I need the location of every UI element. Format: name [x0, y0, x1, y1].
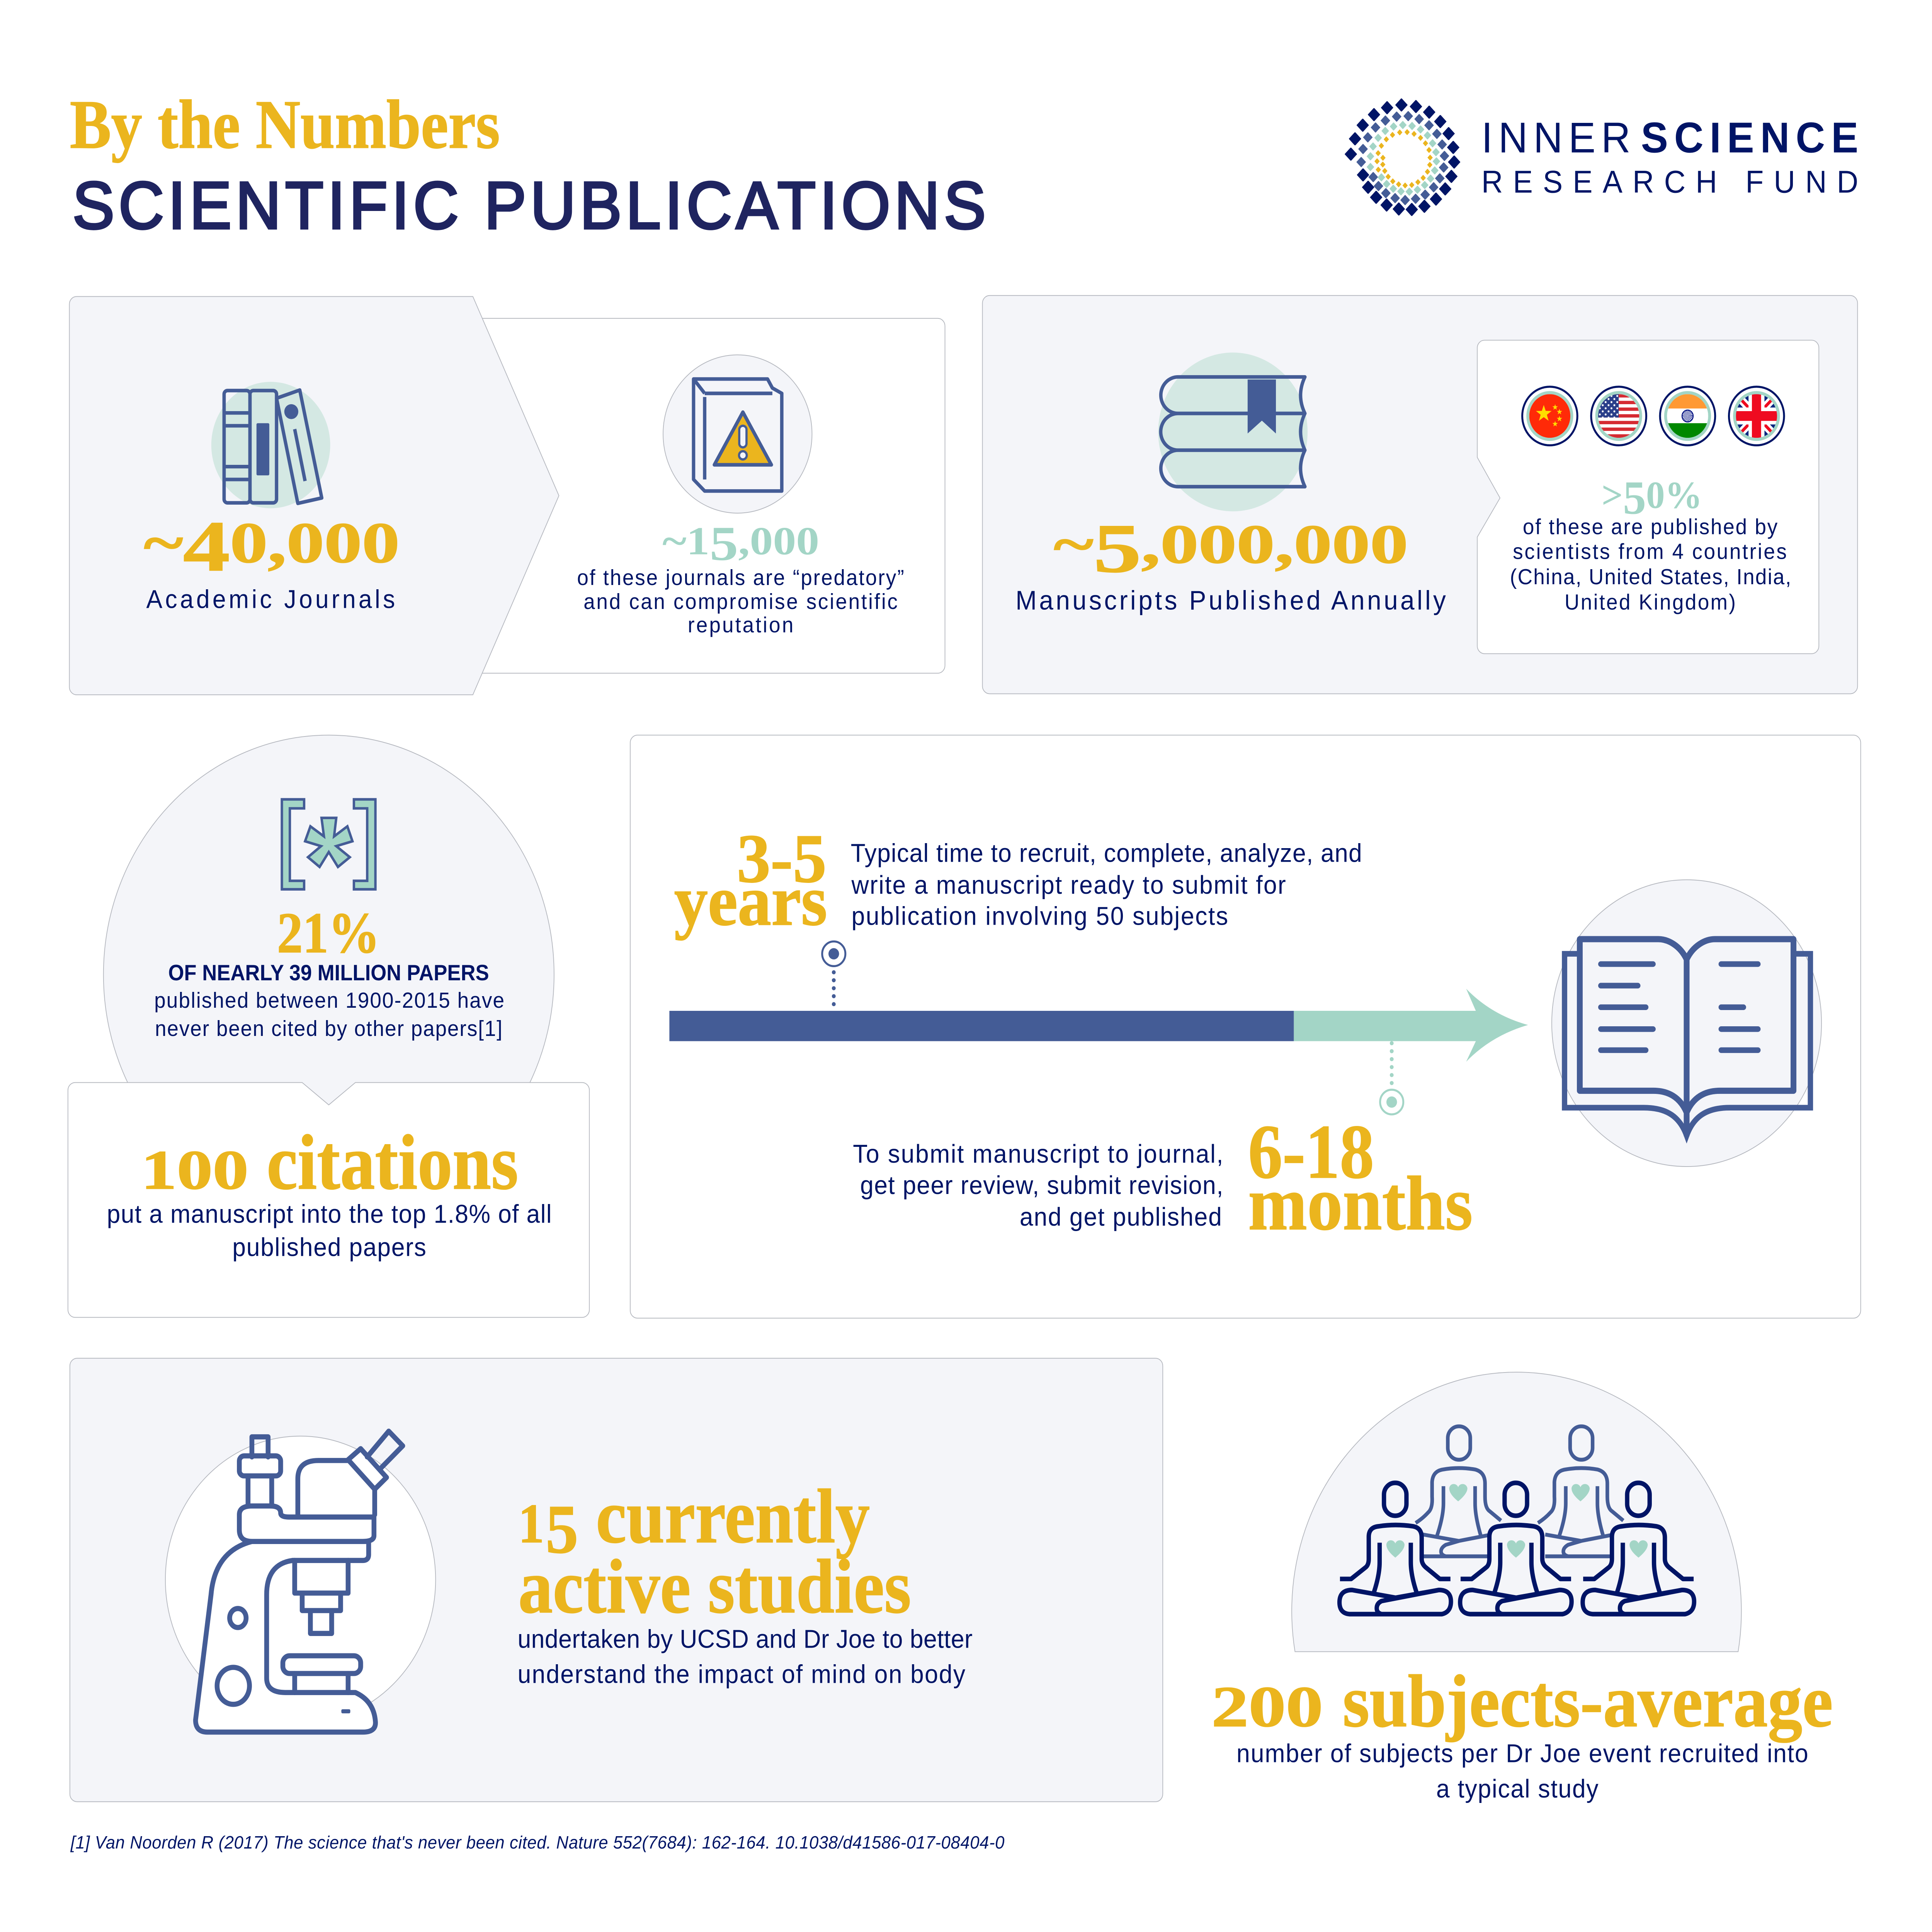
heading: 15 currently active studies: 5 — [546, 1491, 578, 1568]
panel: publication timeline — [630, 735, 1861, 1318]
icon: open book — [1552, 880, 1821, 1167]
stat: 200 subjects-average: subjects-average — [1343, 1660, 1833, 1743]
callout: four countries — [1477, 340, 1819, 654]
stat: ~5,000,000: ,000,000 — [1141, 514, 1408, 575]
text: four countries: (China, United States, India, — [1510, 565, 1791, 589]
panel: subjects average — [1211, 1372, 1833, 1803]
marker: 6-18 months pin — [1380, 1043, 1403, 1114]
heading: 15 currently active studies: 1 — [518, 1493, 544, 1554]
stat: >50%: > — [1602, 474, 1622, 516]
stat: >50%: 5 — [1623, 471, 1646, 524]
text: four countries — [1510, 514, 1791, 614]
icon: flag of the United States — [1591, 387, 1646, 445]
text: submit and publish: get peer review, submit revision, — [860, 1171, 1223, 1200]
text: recruit to manuscript: publication involving 50 subjects — [851, 902, 1228, 930]
title: By the Numbers: By the Numbers — [70, 86, 500, 163]
text: UCSD and Dr Joe: undertaken by UCSD and Dr Joe to better — [517, 1625, 973, 1653]
text: submit and publish — [853, 1139, 1223, 1231]
stat: ~5,000,000: 5 — [1094, 510, 1141, 587]
icon: meditating people dome — [1292, 1372, 1742, 1652]
stat: 6-18 months: 6-18 — [1248, 1109, 1374, 1194]
stat: 6-18 months — [1248, 1109, 1473, 1246]
stat: 200 subjects-average: 200 — [1211, 1674, 1323, 1739]
text: UCSD and Dr Joe — [517, 1625, 973, 1689]
stat: 3-5 years — [674, 820, 827, 940]
arrow: timeline — [669, 989, 1528, 1062]
icon: warning book — [663, 355, 812, 513]
text: predatory journals: of these journals are “predatory” — [577, 565, 904, 590]
icon: stacked books with bookmark — [1158, 352, 1308, 511]
icon: flag of India — [1660, 387, 1715, 445]
logo text: RESEARCH FUND: RESEARCH FUND — [1481, 164, 1858, 199]
stat: ~40,000: 4 — [183, 507, 230, 586]
icon: bracketed asterisk — [282, 799, 376, 889]
stat: ~40,000: ~ — [144, 511, 172, 575]
logo: InnerScience Research Fund — [1345, 99, 1858, 216]
text: recruit to manuscript: Typical time to recruit, complete, analyze, and — [851, 839, 1362, 867]
stat: 100 citations: 100 — [141, 1139, 248, 1201]
text: submit and publish: and get published — [1020, 1202, 1222, 1231]
logo text: SCIENCE bold: SCIENCE — [1641, 113, 1858, 162]
stat: 21%: 21% — [277, 901, 380, 965]
title: Scientific Publications: SCIENTIFIC PUBLICATIONS — [73, 168, 986, 243]
logo mark: mosaic sunburst — [1345, 99, 1460, 216]
icon: microscope — [165, 1431, 435, 1732]
text: top 1.8 percent: put a manuscript into the top 1.8% of all — [107, 1200, 552, 1228]
stat: 6-18 months: months — [1248, 1160, 1473, 1246]
heading: 15 currently active studies: active studies — [518, 1544, 911, 1629]
heading: 15 currently active studies: currently — [596, 1473, 870, 1559]
text: per Dr Joe event — [1236, 1739, 1808, 1803]
panel: uncited papers bubble — [104, 735, 554, 1214]
stat: ~15,000: ,000 — [738, 519, 819, 563]
text: four countries: scientists from 4 countries — [1513, 539, 1787, 564]
text: per Dr Joe event: a typical study — [1436, 1774, 1599, 1803]
label: manuscripts published annually: Manuscripts Published Annually — [1015, 586, 1446, 616]
marker: 3-5 years pin — [822, 941, 845, 1008]
stat: 3-5 years: years — [674, 861, 827, 940]
logo text: INNER: INNER — [1481, 113, 1631, 162]
text: top 1.8 percent: published papers — [232, 1233, 426, 1262]
panel: 100 citations — [68, 1083, 589, 1317]
text: of nearly 39 million papers: never been cited by other papers[1] — [155, 1016, 502, 1041]
text: of nearly 39 million papers — [154, 960, 504, 1041]
icon: flag of China — [1522, 387, 1577, 445]
stat: ~5,000,000: ~ — [1054, 514, 1081, 575]
text: top 1.8 percent — [107, 1200, 552, 1262]
stat: ~15,000: ~1 — [662, 519, 700, 563]
text: UCSD and Dr Joe: understand the impact of mind on body — [517, 1660, 966, 1689]
text: submit and publish: To submit manuscript to journal, — [853, 1139, 1223, 1168]
stat: ~15,000: 5 — [710, 517, 738, 571]
panel: academic journals — [70, 296, 559, 695]
label: academic journals: Academic Journals — [146, 585, 395, 614]
panel: manuscripts published annually — [983, 296, 1857, 694]
text: of nearly 39 million papers: published between 1900-2015 have — [154, 988, 504, 1012]
text: predatory journals: reputation — [688, 612, 793, 637]
panel: active studies — [70, 1358, 1163, 1802]
text: four countries: of these are published by — [1523, 514, 1778, 539]
text: predatory journals — [577, 565, 904, 637]
stat: ~40,000: 0,000 — [230, 511, 400, 575]
stat: >50%: 0% — [1646, 474, 1702, 516]
text: of nearly 39 million papers: OF NEARLY 39 MILLION PAPERS — [168, 960, 489, 985]
text: four countries: United Kingdom) — [1565, 590, 1736, 614]
text: predatory journals: and can compromise scientific — [583, 589, 898, 614]
stat: 3-5 years: 3-5 — [737, 820, 827, 897]
text: recruit to manuscript — [851, 839, 1362, 930]
panel: predatory journals callout — [459, 318, 945, 673]
heading: 15 currently active studies — [518, 1473, 911, 1629]
footnote: [1] Van Noorden R (2017) The science that's never been cited. Nature 552(7684): 162-164. 10.1038/d41586-017-08404-0 — [70, 1832, 1004, 1852]
text: recruit to manuscript: write a manuscript ready to submit for — [851, 871, 1286, 899]
icon: books — [211, 382, 330, 508]
text: per Dr Joe event: number of subjects per Dr Joe event recruited into — [1236, 1739, 1808, 1768]
stat: 100 citations: citations — [267, 1119, 518, 1206]
icon: flag of the United Kingdom — [1729, 387, 1784, 445]
